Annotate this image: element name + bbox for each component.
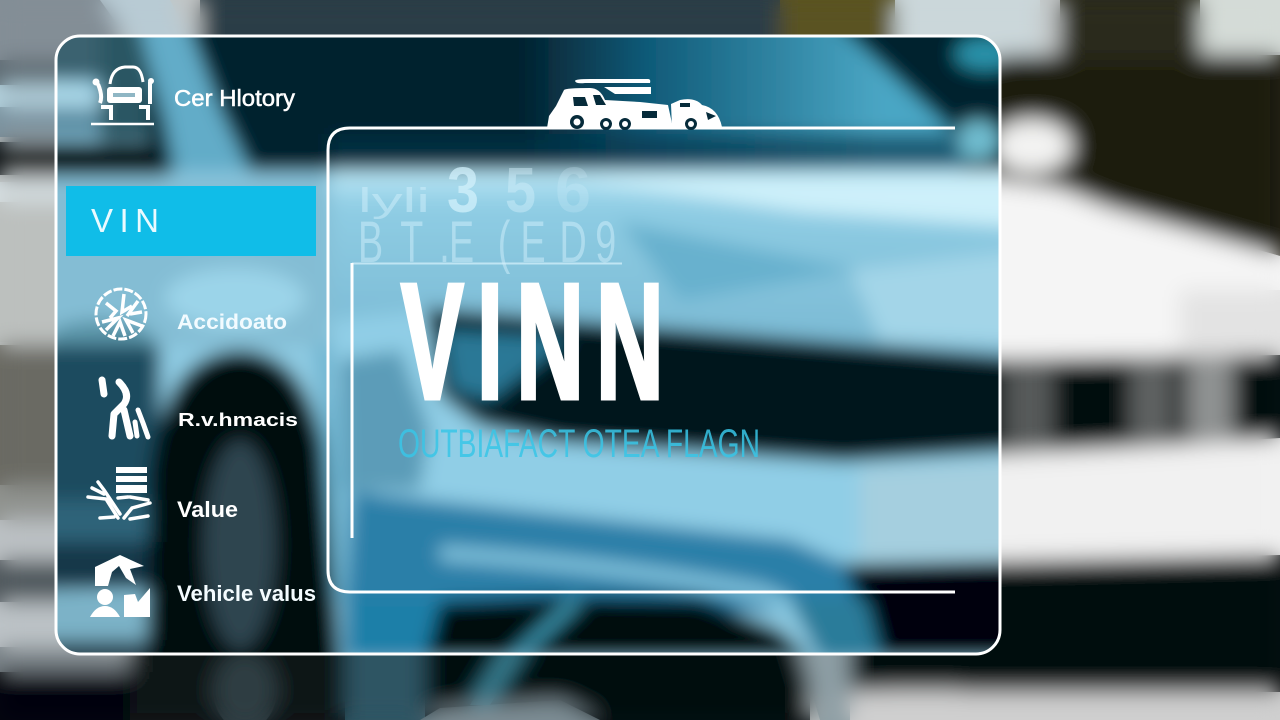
icon: accidents [96, 289, 146, 339]
label: maintenance: R.v.hmacis [178, 410, 298, 430]
faded text block: lyli [358, 182, 430, 220]
translucent blue panel with tinted car [58, 38, 998, 652]
label: car history: Cer Hlotory [174, 85, 296, 111]
active tab: VIN [66, 186, 316, 256]
icon: car on lift [91, 67, 154, 124]
icon: vehicle value [90, 555, 150, 617]
cyan subtitle: OUTBIAFACT OTEA FLAGN [398, 422, 760, 466]
icon: maintenance figure [102, 380, 148, 437]
outer panel frame [56, 36, 1000, 654]
faded text block: 5 [505, 154, 536, 226]
label: value: Value [177, 497, 238, 522]
sidebar: navigation [66, 67, 316, 617]
vin content rule [352, 262, 622, 264]
main heading VINN: VINN [401, 251, 664, 434]
faded text block: BT.E(ED9 [358, 211, 616, 275]
inner panel frame [328, 128, 955, 592]
label: accidents: Accidoato [177, 311, 287, 334]
icon: cars on top of frame [547, 79, 722, 130]
icon: value records [88, 467, 150, 519]
faded text block: 6 [555, 154, 591, 226]
faded text block: 3 [447, 154, 479, 226]
faded text block [358, 154, 616, 275]
active tab: VIN: VIN [91, 202, 159, 239]
label: vehicle value: Vehicle valus [177, 581, 316, 606]
